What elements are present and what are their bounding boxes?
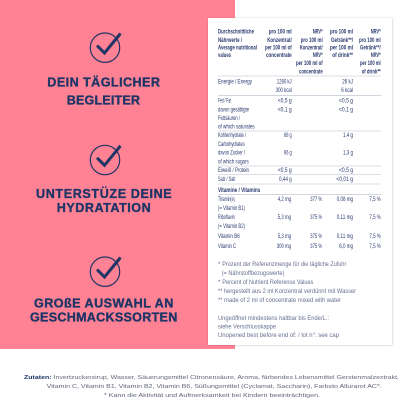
table rows: <0,5 g (278, 167, 292, 174)
heading: daily companion: BEGLEITER (67, 94, 140, 108)
table rows: 4,2 mg (278, 196, 291, 203)
footnotes (218, 261, 356, 339)
table header: Konzentrat/ (300, 45, 323, 52)
table rows: <0,5 g (339, 97, 353, 104)
table rows: 375 % (310, 214, 322, 221)
table header: Nährwerte / (218, 37, 242, 44)
table rows: 7,5 % (369, 196, 381, 203)
heading: hydration: HYDRATATION (57, 201, 151, 215)
table rows: Vitamine / Vitamins (218, 187, 261, 194)
heading: flavours: GESCHMACKSSORTEN (30, 311, 177, 325)
table rows: 0,11 mg (337, 214, 353, 221)
table rows: 300 mg (277, 243, 291, 250)
table header: NRV* (313, 52, 323, 59)
table rows: 6 kcal (341, 87, 353, 94)
table header: NRV* (371, 29, 381, 36)
table rows: davon gesättigte (218, 106, 249, 113)
table rows: Salz / Salt (218, 176, 235, 183)
icon: check circle 2 (90, 145, 120, 175)
table rows: 1,4 g (343, 132, 353, 139)
table rows: <0,01 g (336, 176, 353, 183)
table header: concentrate (266, 52, 292, 59)
table rows: 7,5 % (369, 214, 381, 221)
table rows: Carbohydrates (218, 141, 245, 148)
table header: NRV* (313, 29, 323, 36)
footnotes: siehe Verschlusskappe (218, 324, 277, 331)
table header: NRV* (371, 52, 381, 59)
table header (218, 29, 381, 75)
footnotes: Unopened best before end of: / lot n°: see cap (218, 332, 340, 339)
table header: Average nutritional (218, 45, 257, 52)
table rows: 6,0 mg (339, 243, 353, 250)
table header: Getränk**/ (360, 45, 381, 52)
ingredients text: * Kann die Aktivität und Aufmerksamkeit bei Kindern beeinträchtigen. (104, 393, 320, 399)
table rows: 5,3 mg (278, 214, 291, 221)
table header: pro 100 ml (269, 29, 292, 36)
table rows: of which sugars (218, 159, 249, 166)
panel: nutrition card (208, 18, 392, 345)
heading: daily companion: DEIN TÄGLICHER (47, 75, 160, 90)
table rows: Riboflavin (218, 214, 235, 221)
table rows: Energie / Energy (218, 79, 253, 86)
footnotes: * (218, 279, 221, 286)
table rows: 377 % (310, 196, 322, 203)
table header: pro 100 ml (330, 29, 353, 36)
table rows: 5,3 mg (278, 233, 291, 240)
table header: Getränk**/ (331, 37, 353, 44)
table header: values (218, 52, 231, 59)
table rows: <0,1 g (339, 106, 353, 113)
heading: hydration (36, 186, 172, 215)
table rows: <0,5 g (278, 97, 292, 104)
icon: check circle 1 (90, 33, 120, 62)
table rows: <0,5 g (339, 167, 353, 174)
table header: per 100 ml (330, 45, 353, 52)
footnotes: (= Nährstoffbezugswerte) (222, 270, 284, 277)
table rows: Fett / Fat (218, 97, 231, 104)
table rows: Eiweiß / Protein (218, 167, 249, 174)
table header: concentrate (299, 68, 323, 75)
table rows: Vitamin B6 (218, 233, 240, 240)
table rows: 66 g (284, 150, 292, 157)
table header: per 100 ml of (265, 45, 292, 52)
panel: pink background (0, 0, 235, 349)
icon: check circle 3 (90, 257, 120, 286)
table rows: 26 kJ (342, 79, 353, 86)
ingredients text: Vitamin C, Vitamin B1, Vitamin B2, Vitamin B6, Süßungsmittel (Cyclamat, Saccharin), Farbsto Allurarot AC*. (47, 384, 382, 390)
table header: of drink** (362, 68, 381, 75)
table header: pro 100 ml (359, 37, 381, 44)
table rows: <0,1 g (278, 106, 292, 113)
footnotes: Ungeöffnet mindestens haltbar bis Ende/L.: (218, 315, 329, 322)
ingredients text (24, 375, 399, 399)
table rows: 0,44 g (279, 176, 292, 183)
table rows: 1,3 g (343, 150, 353, 157)
table rows: Vitamin C (218, 243, 236, 250)
panel: benefits (30, 33, 177, 325)
table rows: 0,08 mg (337, 196, 353, 203)
table rows: 300 kcal (276, 87, 292, 94)
table rows: 375 % (310, 243, 322, 250)
table rows: (= Vitamin B1) (218, 205, 245, 212)
table rows: Fettsäuren / (218, 115, 240, 122)
heading: daily companion (47, 75, 160, 108)
table header: per 100 ml of (296, 60, 323, 67)
table header: Konzentrat/ (267, 37, 292, 44)
table rows: 0,11 mg (337, 233, 353, 240)
table rows: 1280 kJ (277, 79, 292, 86)
table rows: of which saturates (218, 124, 255, 131)
footnotes: ** hergestellt aus 2 ml Konzentrat verdünnt mit Wasser (218, 288, 356, 295)
table header: pro 100 ml (301, 37, 323, 44)
heading: flavours: GROßE AUSWAHL AN (34, 297, 173, 311)
table header: per 100 ml (360, 60, 381, 67)
table rows: 68 g (284, 132, 292, 139)
footnotes: * (218, 261, 221, 268)
table rows: Thiamin(e) (218, 196, 235, 203)
table header: Durchschnittliche (218, 29, 254, 36)
ingredients text: Zutaten: Invertzuckersirup, Wasser, Säuerungsmittel Citronensäure, Aroma, färbendes Lebensmittel Gerstenmalzextrakt, (24, 375, 399, 381)
table rows (218, 79, 381, 250)
footnotes: Prozent der Referenzmenge für die tägliche Zufuhr (222, 261, 346, 268)
table rows: davon Zucker / (218, 150, 245, 157)
footnotes: ** made of 2 ml of concentrate mixed with water (218, 297, 341, 304)
footnotes: Percent of Nutrient Reference Values (222, 279, 313, 286)
table rows: 375 % (310, 233, 322, 240)
table header: of drink** (332, 52, 353, 59)
table rows: Kohlenhydrate / (218, 132, 246, 139)
table rows: (= Vitamin B2) (218, 223, 245, 230)
heading: flavours (30, 297, 177, 325)
heading: hydration: UNTERSTÜZE DEINE (36, 186, 172, 201)
table rows: 7,5 % (369, 233, 381, 240)
table rows: 7,5 % (369, 243, 381, 250)
